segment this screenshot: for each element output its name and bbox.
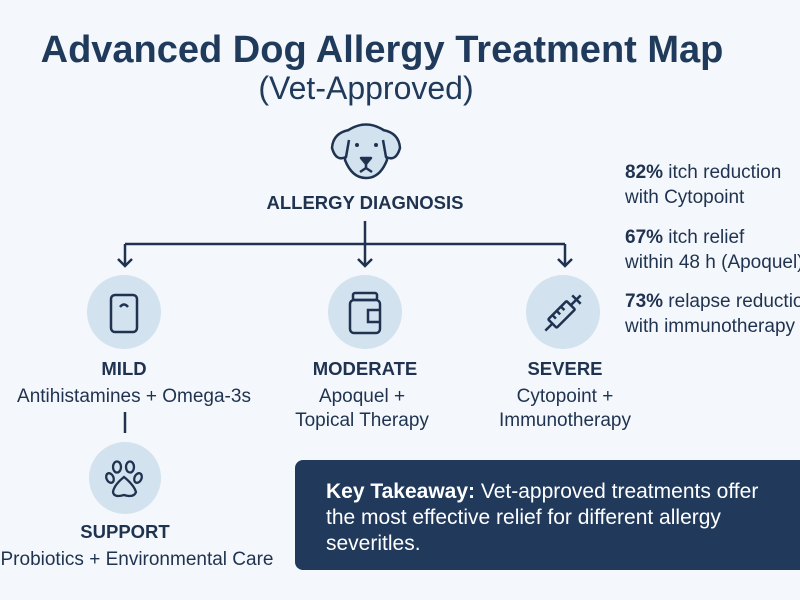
arrows: tree connector bbox=[118, 221, 572, 266]
title: Advanced Dog Allergy Treatment Map bbox=[41, 29, 723, 71]
subtitle: (Vet-Approved) bbox=[258, 70, 474, 106]
panel: support bbox=[0, 442, 274, 570]
panel: moderate: Topical Therapy bbox=[295, 410, 429, 431]
panel: mild bbox=[17, 275, 251, 407]
icon: syringe bbox=[541, 291, 585, 335]
panel: moderate bbox=[295, 275, 429, 431]
stats: within 48 h (Apoquel) bbox=[624, 252, 800, 273]
callout: key takeaway bbox=[295, 460, 800, 570]
panel: support: SUPPORT bbox=[80, 521, 170, 542]
icon: paw bbox=[105, 462, 143, 496]
stats: 82% itch reduction bbox=[625, 162, 781, 183]
callout: key takeaway: the most effective relief for different allergy bbox=[326, 506, 721, 529]
stats bbox=[624, 162, 800, 337]
panel: severe: Cytopoint + bbox=[517, 386, 613, 407]
stats: 67% itch relief bbox=[625, 227, 745, 248]
icon: pill bottle bbox=[350, 293, 380, 333]
panel: severe: SEVERE bbox=[527, 358, 603, 379]
panel: moderate: MODERATE bbox=[313, 358, 417, 379]
callout: key takeaway: severitles. bbox=[326, 532, 421, 555]
panel: severe bbox=[499, 275, 631, 431]
icon: tablet bbox=[111, 295, 137, 332]
stats: with Cytopoint bbox=[624, 187, 745, 208]
panel: moderate: Apoquel + bbox=[319, 386, 405, 407]
callout: key takeaway: Key Takeaway: Vet-approved treatments offer bbox=[326, 480, 758, 503]
panel: severe: Immunotherapy bbox=[499, 410, 631, 431]
panel: support: Probiotics + Environmental Care bbox=[0, 549, 274, 570]
panel: mild: MILD bbox=[101, 358, 147, 379]
heading: allergy diagnosis: ALLERGY DIAGNOSIS bbox=[266, 192, 464, 213]
stats: with immunotherapy bbox=[624, 316, 796, 337]
panel: mild: Antihistamines + Omega-3s bbox=[17, 386, 251, 407]
icon: dog bbox=[332, 124, 400, 178]
